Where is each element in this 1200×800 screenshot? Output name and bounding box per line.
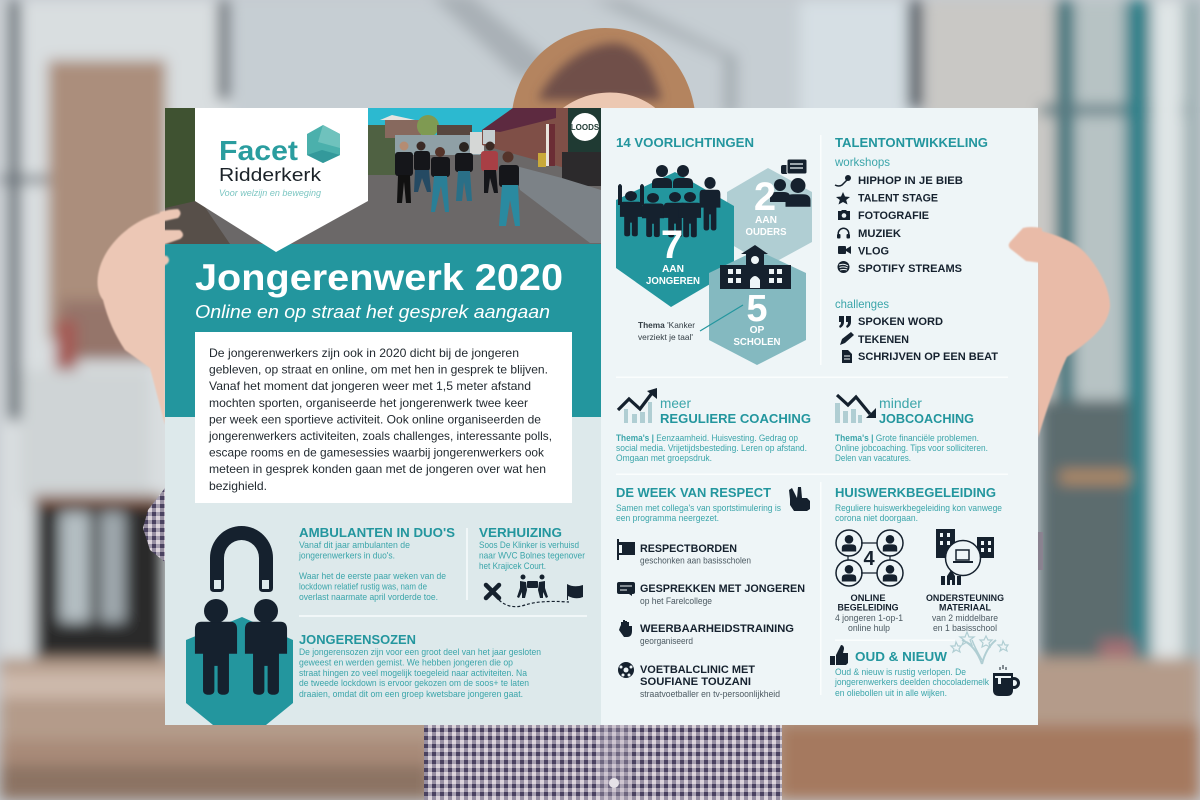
section: minder jobcoaching: Thema's | Grote financiële problemen. [835, 433, 979, 444]
section: talentontwikkeling: MUZIEK [858, 228, 901, 240]
section: jongerensozen: De jongerensozen zijn voor een groot deel van het jaar gesloten [299, 647, 541, 658]
label: op scholen: 5 [746, 288, 768, 330]
hair [512, 28, 695, 112]
label: op scholen: SCHOLEN [734, 337, 780, 348]
label: online begeleiding: 4 jongeren 1-op-1 [835, 613, 903, 623]
person 2 [414, 142, 431, 192]
section: verhuizing [479, 526, 585, 607]
section: talentontwikkeling: TEKENEN [858, 334, 909, 346]
section: jongerensozen: de tweede lockdown is ervoor gekozen om de soos+ te laten [299, 678, 529, 689]
item: weerbaarheidstraining [619, 620, 794, 646]
label: aan jongeren [646, 223, 700, 287]
icon: magnet with two youth workers on hexagon [186, 526, 293, 725]
icon: falling chart [835, 395, 876, 423]
intro text box: escape rooms en de gamesessies waarbij jongerenwerkers ook [209, 447, 544, 460]
label: aan ouders: OUDERS [746, 227, 787, 238]
label: online begeleiding: BEGELEIDING [838, 602, 898, 614]
section: ambulanten in duo's [298, 526, 455, 603]
section: verhuizing: Soos De Klinker is verhuisd [479, 540, 579, 551]
label: aan ouders: AAN [755, 215, 777, 226]
logo hexagon [307, 125, 340, 163]
section: talentontwikkeling: HIPHOP IN JE BIEB [858, 175, 963, 187]
label: online begeleiding: ONLINE [850, 593, 886, 604]
section: oud en nieuw: jongerenwerkers deelden chocolademelk [834, 677, 989, 688]
section: de week van respect: Samen met collega's van sportstimulering is [616, 503, 781, 514]
section: talentontwikkeling: FOTOGRAFIE [858, 210, 930, 222]
thema callout: Thema 'Kanker [638, 320, 695, 330]
section: meer reguliere coaching: social media. Vrijetijdsbesteding. Leren op afstand. [616, 443, 807, 454]
section: minder jobcoaching: minder [879, 395, 922, 411]
item: respectborden: RESPECTBORDEN [640, 543, 737, 555]
label: aan jongeren: AAN [662, 264, 684, 275]
person 1 [395, 142, 413, 203]
logo shield: Voor welzijn en beweging [219, 188, 322, 199]
label: op scholen [734, 288, 780, 348]
section: talentontwikkeling: SPOKEN WORD [858, 316, 943, 328]
intro text box: Vanaf het moment dat jongeren weer met 1,5 meter afstand [209, 380, 531, 393]
talent icons [835, 175, 854, 363]
section: minder jobcoaching: Online jobcoaching. Tips voor solliciteren. [835, 443, 988, 454]
hexagon: aan jongeren [616, 172, 734, 307]
icon: fireworks [951, 632, 1008, 664]
section: verhuizing: naar WVC Bolnes tegenover [479, 550, 585, 562]
thema callout: verziekt je taal' [638, 332, 693, 342]
section: talentontwikkeling [834, 136, 998, 363]
section: jongerensozen: straat hingen zo veel mogelijk toegeleid naar activiteiten. Na [299, 668, 528, 679]
section: huiswerkbegeleiding [835, 486, 1004, 633]
logo shield: Ridderkerk [219, 164, 322, 185]
intro text box: De jongerenwerkers zijn ook in 2020 dicht bij de jongeren [209, 347, 519, 360]
person 5 [481, 142, 498, 193]
hexagon: op scholen [709, 250, 806, 365]
section: jongerensozen: draaien, omdat dit om een groep kwetsbare jongeren gaat. [299, 689, 523, 700]
section: talentontwikkeling: SCHRIJVEN OP EEN BEAT [858, 351, 998, 363]
right fingers over poster edge [1009, 227, 1042, 263]
item: gesprekken met jongeren: GESPREKKEN MET JONGEREN [640, 583, 805, 595]
section: talentontwikkeling: TALENTONTWIKKELING [835, 136, 988, 150]
team photo [165, 108, 601, 244]
section: ambulanten in duo's: lockdown relatief rustig was, nam de [299, 582, 427, 592]
section: talentontwikkeling: challenges [835, 297, 889, 311]
section: oud en nieuw: OUD & NIEUW [855, 650, 947, 664]
section: ambulanten in duo's: jongerenwerkers in duo's. [298, 550, 395, 562]
section: huiswerkbegeleiding: Reguliere huiswerkbegeleiding kon vanwege [835, 503, 1002, 514]
subtitle: Online en op straat het gesprek aangaan [195, 301, 550, 322]
item: respectborden: geschonken aan basisscholen [640, 556, 751, 566]
person 4 [455, 142, 473, 201]
intro text box: jongerenwerkers activiteiten, zoals challenges, interessante polls, [208, 430, 552, 443]
section: de week van respect: een programma neergezet. [616, 513, 719, 524]
icon: rising chart [618, 388, 657, 423]
section: jongerensozen: geweest en werden gemist. We hebben jongeren die op [299, 657, 513, 668]
label: aan ouders: 2 [754, 175, 776, 219]
right hand [1023, 227, 1110, 438]
person 3 [431, 147, 450, 212]
section: ambulanten in duo's: Waar het de eerste paar weken van de [299, 571, 446, 582]
section: jongerensozen: JONGERENSOZEN [299, 633, 416, 647]
section: meer reguliere coaching: Thema's | Eenzaamheid. Huisvesting. Gedrag op [616, 433, 798, 444]
icon: peace hand [789, 487, 810, 511]
section: oud en nieuw: en oliebollen uit in alle wijken. [835, 688, 947, 699]
label: ondersteuning materiaal [926, 593, 1004, 633]
icon: schools with laptop [936, 529, 994, 585]
section: talentontwikkeling: SPOTIFY STREAMS [858, 263, 963, 275]
poster [165, 108, 1038, 725]
hexagon: aan ouders [727, 168, 812, 266]
logo shield: Facet [219, 135, 298, 166]
section: oud en nieuw: Oud & nieuw is rustig verlopen. De [835, 667, 966, 678]
section: minder jobcoaching: Delen van vacatures. [835, 453, 911, 464]
item: voetbalclinic [618, 662, 780, 699]
left fingers over poster edge [160, 209, 183, 268]
left sleeve [143, 488, 165, 562]
label: aan ouders [746, 175, 787, 238]
section: talentontwikkeling: VLOG [858, 246, 889, 258]
label: ondersteuning materiaal: en 1 basisschool [933, 623, 997, 633]
team photo: LOODS [571, 123, 600, 132]
icon: thumbs up [830, 645, 848, 665]
label: online begeleiding: online hulp [848, 623, 890, 633]
title: Jongerenwerk 2020 [195, 257, 563, 298]
intro text box: gebleven, op straat en online, om met hen in gesprek te blijven. [209, 364, 548, 377]
section: verhuizing: VERHUIZING [479, 526, 562, 540]
left page lower background [165, 417, 601, 725]
section: meer reguliere coaching: meer [660, 395, 691, 411]
teal title band [165, 244, 601, 417]
item: weerbaarheidstraining: WEERBAARHEIDSTRAINING [640, 623, 794, 635]
logo shield [195, 108, 368, 252]
thema callout [638, 305, 743, 342]
item: weerbaarheidstraining: georganiseerd [640, 636, 693, 646]
section: 14 voorlichtingen: 14 VOORLICHTINGEN [616, 136, 754, 150]
label: op scholen: OP [750, 325, 765, 336]
icon: four youths online: 4 [863, 548, 875, 570]
right page background [601, 108, 1038, 725]
item: voetbalclinic: SOUFIANE TOUZANI [640, 676, 751, 688]
intro text box: meteen in gesprek konden gaan met de jongeren over wat hen [209, 463, 546, 476]
section: minder jobcoaching [835, 395, 988, 464]
intro text box [195, 332, 572, 503]
label: ondersteuning materiaal: van 2 middelbare [932, 613, 998, 623]
item: respectborden [617, 539, 751, 566]
section: de week van respect [616, 486, 810, 699]
section: talentontwikkeling: workshops [834, 155, 890, 169]
item: gesprekken met jongeren: op het Farelcollege [640, 596, 712, 606]
section: minder jobcoaching: JOBCOACHING [879, 412, 974, 426]
icon: parents with chat [770, 159, 810, 207]
section: oud en nieuw [830, 632, 1018, 699]
section: huiswerkbegeleiding: corona niet doorgaan. [835, 513, 918, 524]
section: verhuizing: het Krajicek Court. [479, 561, 546, 572]
label: ondersteuning materiaal: MATERIAAL [939, 602, 991, 614]
right sleeve [1038, 532, 1043, 570]
icon: school [720, 245, 791, 289]
label: aan jongeren: 7 [661, 223, 683, 267]
section: de week van respect: DE WEEK VAN RESPECT [616, 486, 771, 500]
item: voetbalclinic: VOETBALCLINIC MET [640, 664, 755, 676]
intro text box: bezighield. [209, 480, 267, 493]
section: ambulanten in duo's: overlast naarmate april vorderde toe. [299, 592, 438, 603]
shirt [424, 725, 782, 800]
person 6 [499, 152, 520, 226]
icon: hot cup [993, 665, 1018, 696]
section: 14 voorlichtingen [616, 136, 812, 365]
left hand [98, 212, 165, 425]
intro text box: mochten sporten, organiseerde het jongerenwerk twee keer [209, 397, 528, 410]
section: huiswerkbegeleiding: HUISWERKBEGELEIDING [835, 486, 996, 500]
item: voetbalclinic: straatvoetballer en tv-persoonlijkheid [640, 689, 780, 699]
label: online begeleiding [835, 593, 903, 633]
icon: youth group [618, 165, 720, 237]
section: jongerensozen [299, 633, 541, 700]
section: ambulanten in duo's: AMBULANTEN IN DUO'S [299, 526, 455, 540]
section: talentontwikkeling: TALENT STAGE [858, 192, 939, 204]
section: meer reguliere coaching: REGULIERE COACHING [660, 412, 811, 426]
icon: moving route [486, 574, 583, 607]
icon: four youths online [836, 530, 903, 586]
intro text box: per week een sportieve activiteit. Ook online organiseerden de [209, 413, 541, 426]
label: aan jongeren: JONGEREN [646, 276, 700, 287]
section: meer reguliere coaching: Omgaan met groepsdruk. [616, 453, 712, 464]
section: ambulanten in duo's: Vanaf dit jaar ambulanten de [299, 540, 410, 551]
item: gesprekken met jongeren [617, 582, 805, 606]
label: ondersteuning materiaal: ONDERSTEUNING [926, 593, 1004, 604]
section: meer reguliere coaching [616, 388, 811, 464]
